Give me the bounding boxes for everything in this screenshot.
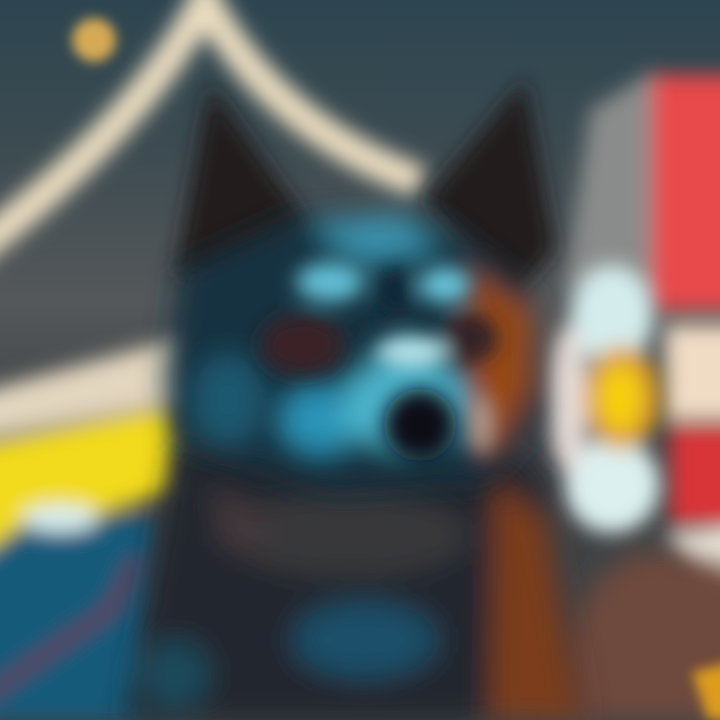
dog face markings bbox=[260, 262, 498, 455]
dog head bbox=[165, 215, 540, 490]
dog body bbox=[125, 430, 585, 720]
background: left panels bbox=[0, 335, 190, 720]
right panels bbox=[565, 70, 720, 610]
dog bbox=[125, 80, 585, 720]
cream arch bbox=[0, 0, 420, 262]
flower bbox=[548, 265, 660, 533]
dog ears bbox=[175, 80, 555, 300]
sun bbox=[72, 18, 116, 62]
ball bbox=[563, 550, 720, 720]
dog nose bbox=[384, 389, 456, 461]
ball mark bbox=[692, 660, 720, 720]
background bbox=[0, 0, 720, 384]
